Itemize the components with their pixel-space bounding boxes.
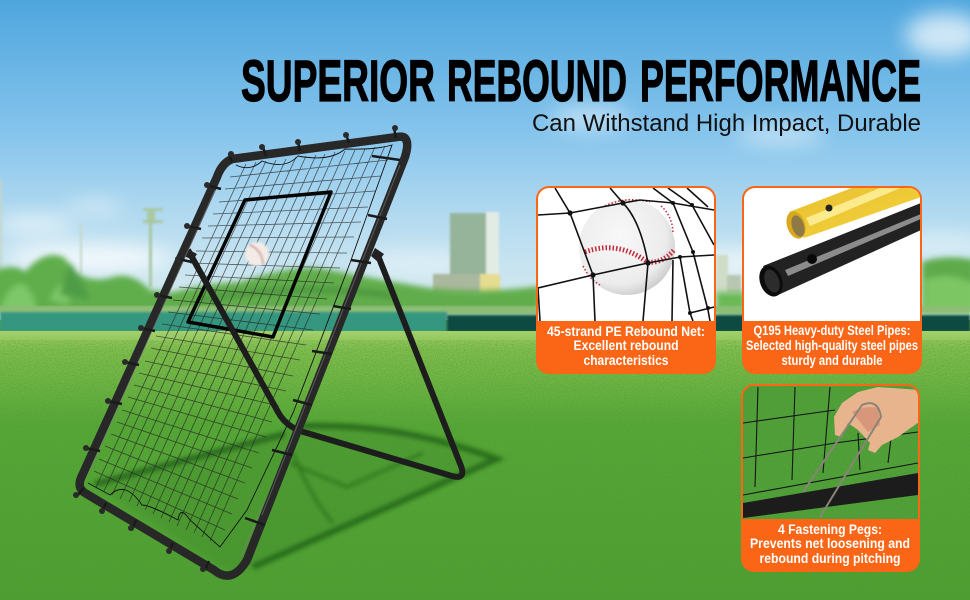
card body <box>742 186 922 374</box>
net mesh <box>94 146 388 541</box>
panel: rebound net <box>536 186 716 374</box>
panel: fastening pegs <box>741 384 920 572</box>
caption: Excellent rebound <box>574 337 678 353</box>
pipes photo <box>742 186 922 321</box>
caption: sturdy and durable <box>782 352 883 368</box>
caption <box>746 322 918 368</box>
tube highlight <box>90 165 400 555</box>
caption: characteristics <box>584 352 669 368</box>
card body <box>536 186 716 374</box>
title: SUPERIOR <box>241 49 435 114</box>
palm shadow <box>852 407 880 432</box>
caption <box>547 323 705 368</box>
caption: rebound during pitching <box>760 550 900 566</box>
caption <box>750 521 910 566</box>
target window <box>188 192 331 337</box>
caption: Prevents net loosening and <box>750 535 910 551</box>
frame clip knobs <box>73 125 398 572</box>
pegs photo <box>741 384 920 520</box>
tree line <box>0 255 970 315</box>
net strands <box>538 188 714 321</box>
rear support frame <box>188 250 462 477</box>
net knots <box>567 200 710 315</box>
card body <box>741 384 920 572</box>
support hinge <box>184 248 384 262</box>
caption: Selected high-quality steel pipes <box>746 337 918 353</box>
black rail <box>743 473 918 518</box>
main tube frame <box>80 137 407 576</box>
frame clips <box>78 128 400 570</box>
caption: Q195 Heavy-duty Steel Pipes: <box>754 322 910 338</box>
peg <box>803 403 881 517</box>
caption: 45-strand PE Rebound Net: <box>547 323 705 339</box>
baseball <box>579 199 675 295</box>
ground shadow of rebounder <box>90 424 497 575</box>
distant light poles <box>0 180 163 287</box>
caption: 4 Fastening Pegs: <box>778 521 882 537</box>
subtitle: Can Withstand High Impact, Durable <box>532 110 921 137</box>
panel: steel pipes <box>742 186 922 374</box>
net border cord <box>88 145 392 547</box>
hand <box>834 387 919 453</box>
product: rebound net frame <box>73 125 462 576</box>
grass texture <box>0 340 970 600</box>
title: REBOUND <box>447 49 627 114</box>
grass field <box>0 331 970 600</box>
title <box>241 49 921 114</box>
black pipe <box>755 203 921 300</box>
net photo <box>536 186 716 321</box>
yellow pipe <box>786 188 920 239</box>
distant buildings <box>433 212 741 294</box>
blurred baseball <box>245 242 269 266</box>
net strands <box>743 387 918 495</box>
outfield wall <box>0 312 447 332</box>
